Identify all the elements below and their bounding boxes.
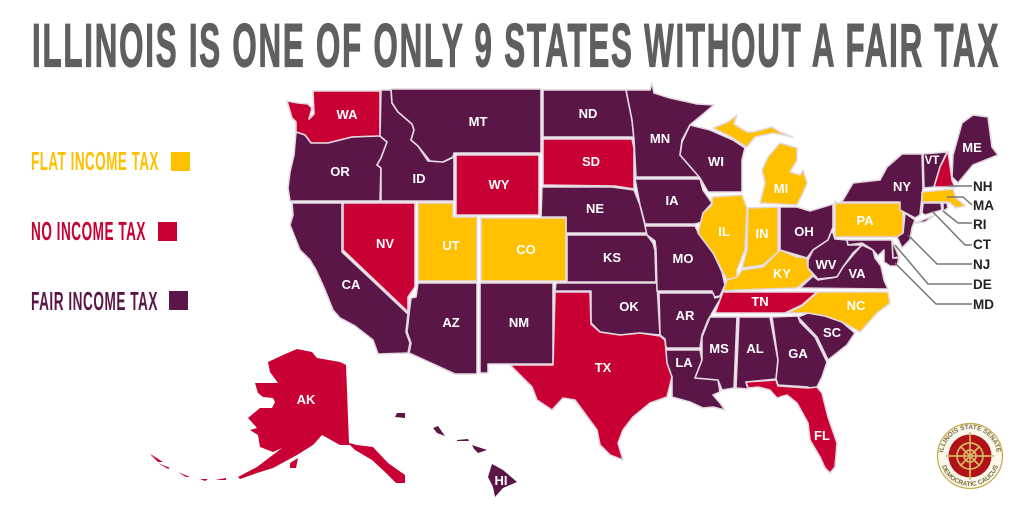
logo: Illinois State Senate Democratic Caucus seal bbox=[936, 422, 1004, 490]
state: ND: ND bbox=[579, 106, 597, 121]
state: OR: OR bbox=[330, 164, 350, 179]
state: VA: VA bbox=[848, 266, 866, 281]
state: ME bbox=[952, 115, 998, 183]
state: AL bbox=[736, 317, 778, 389]
state: NC: NC bbox=[847, 298, 866, 313]
callout: MA: MA bbox=[973, 198, 994, 213]
state: FL bbox=[746, 380, 837, 473]
state: OH: OH bbox=[794, 224, 814, 239]
state: MA bbox=[922, 189, 965, 208]
state: AK: AK bbox=[297, 392, 316, 407]
map of the United States bbox=[150, 83, 998, 497]
callout: RI: RI bbox=[973, 217, 986, 232]
state: TX bbox=[510, 292, 672, 460]
state: NH bbox=[934, 151, 955, 187]
state: SC: SC bbox=[823, 325, 842, 340]
state: LA bbox=[666, 350, 725, 410]
state: ID bbox=[377, 90, 454, 201]
state: PA bbox=[835, 201, 903, 237]
logo: Illinois State Senate Democratic Caucus seal: DEMOCRATIC CAUCUS bbox=[942, 464, 998, 486]
callouts for small northeastern states bbox=[895, 179, 994, 312]
state: MT bbox=[391, 89, 541, 162]
state: FL: FL bbox=[814, 428, 830, 443]
state: AZ: AZ bbox=[442, 315, 460, 330]
state: CA: CA bbox=[342, 277, 361, 292]
state: TX: TX bbox=[595, 360, 612, 375]
state: OK: OK bbox=[619, 299, 639, 314]
state: WY bbox=[456, 155, 539, 215]
state: SC bbox=[798, 313, 855, 360]
state: ND bbox=[543, 90, 634, 137]
state: NE: NE bbox=[586, 201, 604, 216]
state: MN: MN bbox=[650, 131, 670, 146]
state: IL: IL bbox=[718, 224, 730, 239]
state: WY: WY bbox=[489, 177, 510, 192]
state: KS bbox=[567, 235, 656, 282]
state: AR: AR bbox=[676, 308, 695, 323]
state: KY bbox=[723, 250, 813, 291]
state: OK bbox=[555, 283, 660, 335]
state: MO: MO bbox=[673, 251, 693, 266]
state: AR bbox=[659, 293, 722, 348]
state: LA: LA bbox=[675, 355, 693, 370]
legend: fair income tax: FAIR INCOME TAX bbox=[31, 286, 158, 316]
state: SD bbox=[543, 139, 634, 189]
state: WI: WI bbox=[708, 154, 724, 169]
state: CO bbox=[481, 218, 566, 281]
callout: MD: MD bbox=[973, 297, 994, 312]
state: NV bbox=[343, 203, 415, 312]
state: NV: NV bbox=[376, 236, 394, 251]
state: HI: HI bbox=[494, 473, 508, 488]
callout: CT: CT bbox=[973, 237, 992, 252]
state: WV bbox=[808, 230, 862, 279]
state: WA bbox=[287, 91, 380, 143]
state: MD bbox=[847, 240, 899, 266]
state: CT bbox=[922, 203, 942, 215]
state: IN bbox=[742, 207, 778, 268]
legend bbox=[31, 146, 190, 316]
state: ID: ID bbox=[412, 171, 426, 186]
state: TN: TN bbox=[751, 294, 769, 309]
state: VT bbox=[923, 152, 947, 188]
state: CO: CO bbox=[516, 242, 536, 257]
state: TN bbox=[715, 292, 817, 313]
state: OH bbox=[780, 204, 833, 258]
state: NE bbox=[541, 187, 647, 233]
legend: flat income tax: FLAT INCOME TAX bbox=[31, 146, 159, 176]
state: ME: ME bbox=[962, 140, 982, 155]
state: MO bbox=[645, 226, 725, 297]
state: RI bbox=[943, 203, 948, 211]
state: VT: VT bbox=[925, 155, 939, 167]
state: AZ bbox=[407, 283, 477, 374]
logo: Illinois State Senate Democratic Caucus seal: ILLINOIS STATE SENATE bbox=[938, 424, 1002, 452]
legend: fair income tax bbox=[31, 286, 188, 316]
state: MN bbox=[626, 83, 714, 177]
state: MS bbox=[695, 317, 737, 390]
legend: no income tax bbox=[31, 216, 177, 246]
state: WA: WA bbox=[337, 107, 358, 122]
state: MT: MT bbox=[469, 114, 487, 129]
state: WI bbox=[680, 125, 745, 192]
state: GA: GA bbox=[788, 346, 808, 361]
state: KY: KY bbox=[773, 266, 791, 281]
callout: NH: NH bbox=[973, 179, 992, 194]
state: KS: KS bbox=[603, 250, 621, 265]
state: MI: MI bbox=[774, 181, 788, 196]
state: OR bbox=[288, 132, 387, 201]
state: MS: MS bbox=[709, 341, 729, 356]
state: IA: IA bbox=[666, 193, 679, 208]
state: VA bbox=[800, 245, 888, 289]
state: GA bbox=[772, 316, 827, 390]
callout: DE: DE bbox=[973, 277, 992, 292]
state: CA bbox=[290, 203, 410, 354]
state: NM bbox=[480, 283, 553, 373]
state: NJ bbox=[897, 213, 915, 248]
state: NY bbox=[840, 154, 935, 223]
callout: NJ: NJ bbox=[973, 257, 990, 272]
state: PA: PA bbox=[856, 213, 874, 228]
state: UT: UT bbox=[442, 238, 460, 253]
state: IL bbox=[698, 195, 747, 280]
legend: flat income tax bbox=[31, 146, 190, 176]
state: UT bbox=[418, 203, 477, 281]
state: AL: AL bbox=[746, 341, 764, 356]
state: DE bbox=[892, 240, 899, 258]
state: NM: NM bbox=[509, 315, 529, 330]
state: IA bbox=[635, 179, 712, 224]
legend: no income tax: NO INCOME TAX bbox=[31, 216, 146, 246]
state: IN: IN bbox=[756, 226, 768, 241]
state: NY: NY bbox=[893, 179, 911, 194]
state: MI bbox=[713, 115, 807, 205]
state: WV: WV bbox=[816, 257, 837, 272]
state: AK bbox=[150, 349, 405, 483]
state: SD: SD bbox=[582, 154, 600, 169]
state: NC bbox=[787, 292, 890, 332]
state: HI bbox=[395, 413, 517, 497]
